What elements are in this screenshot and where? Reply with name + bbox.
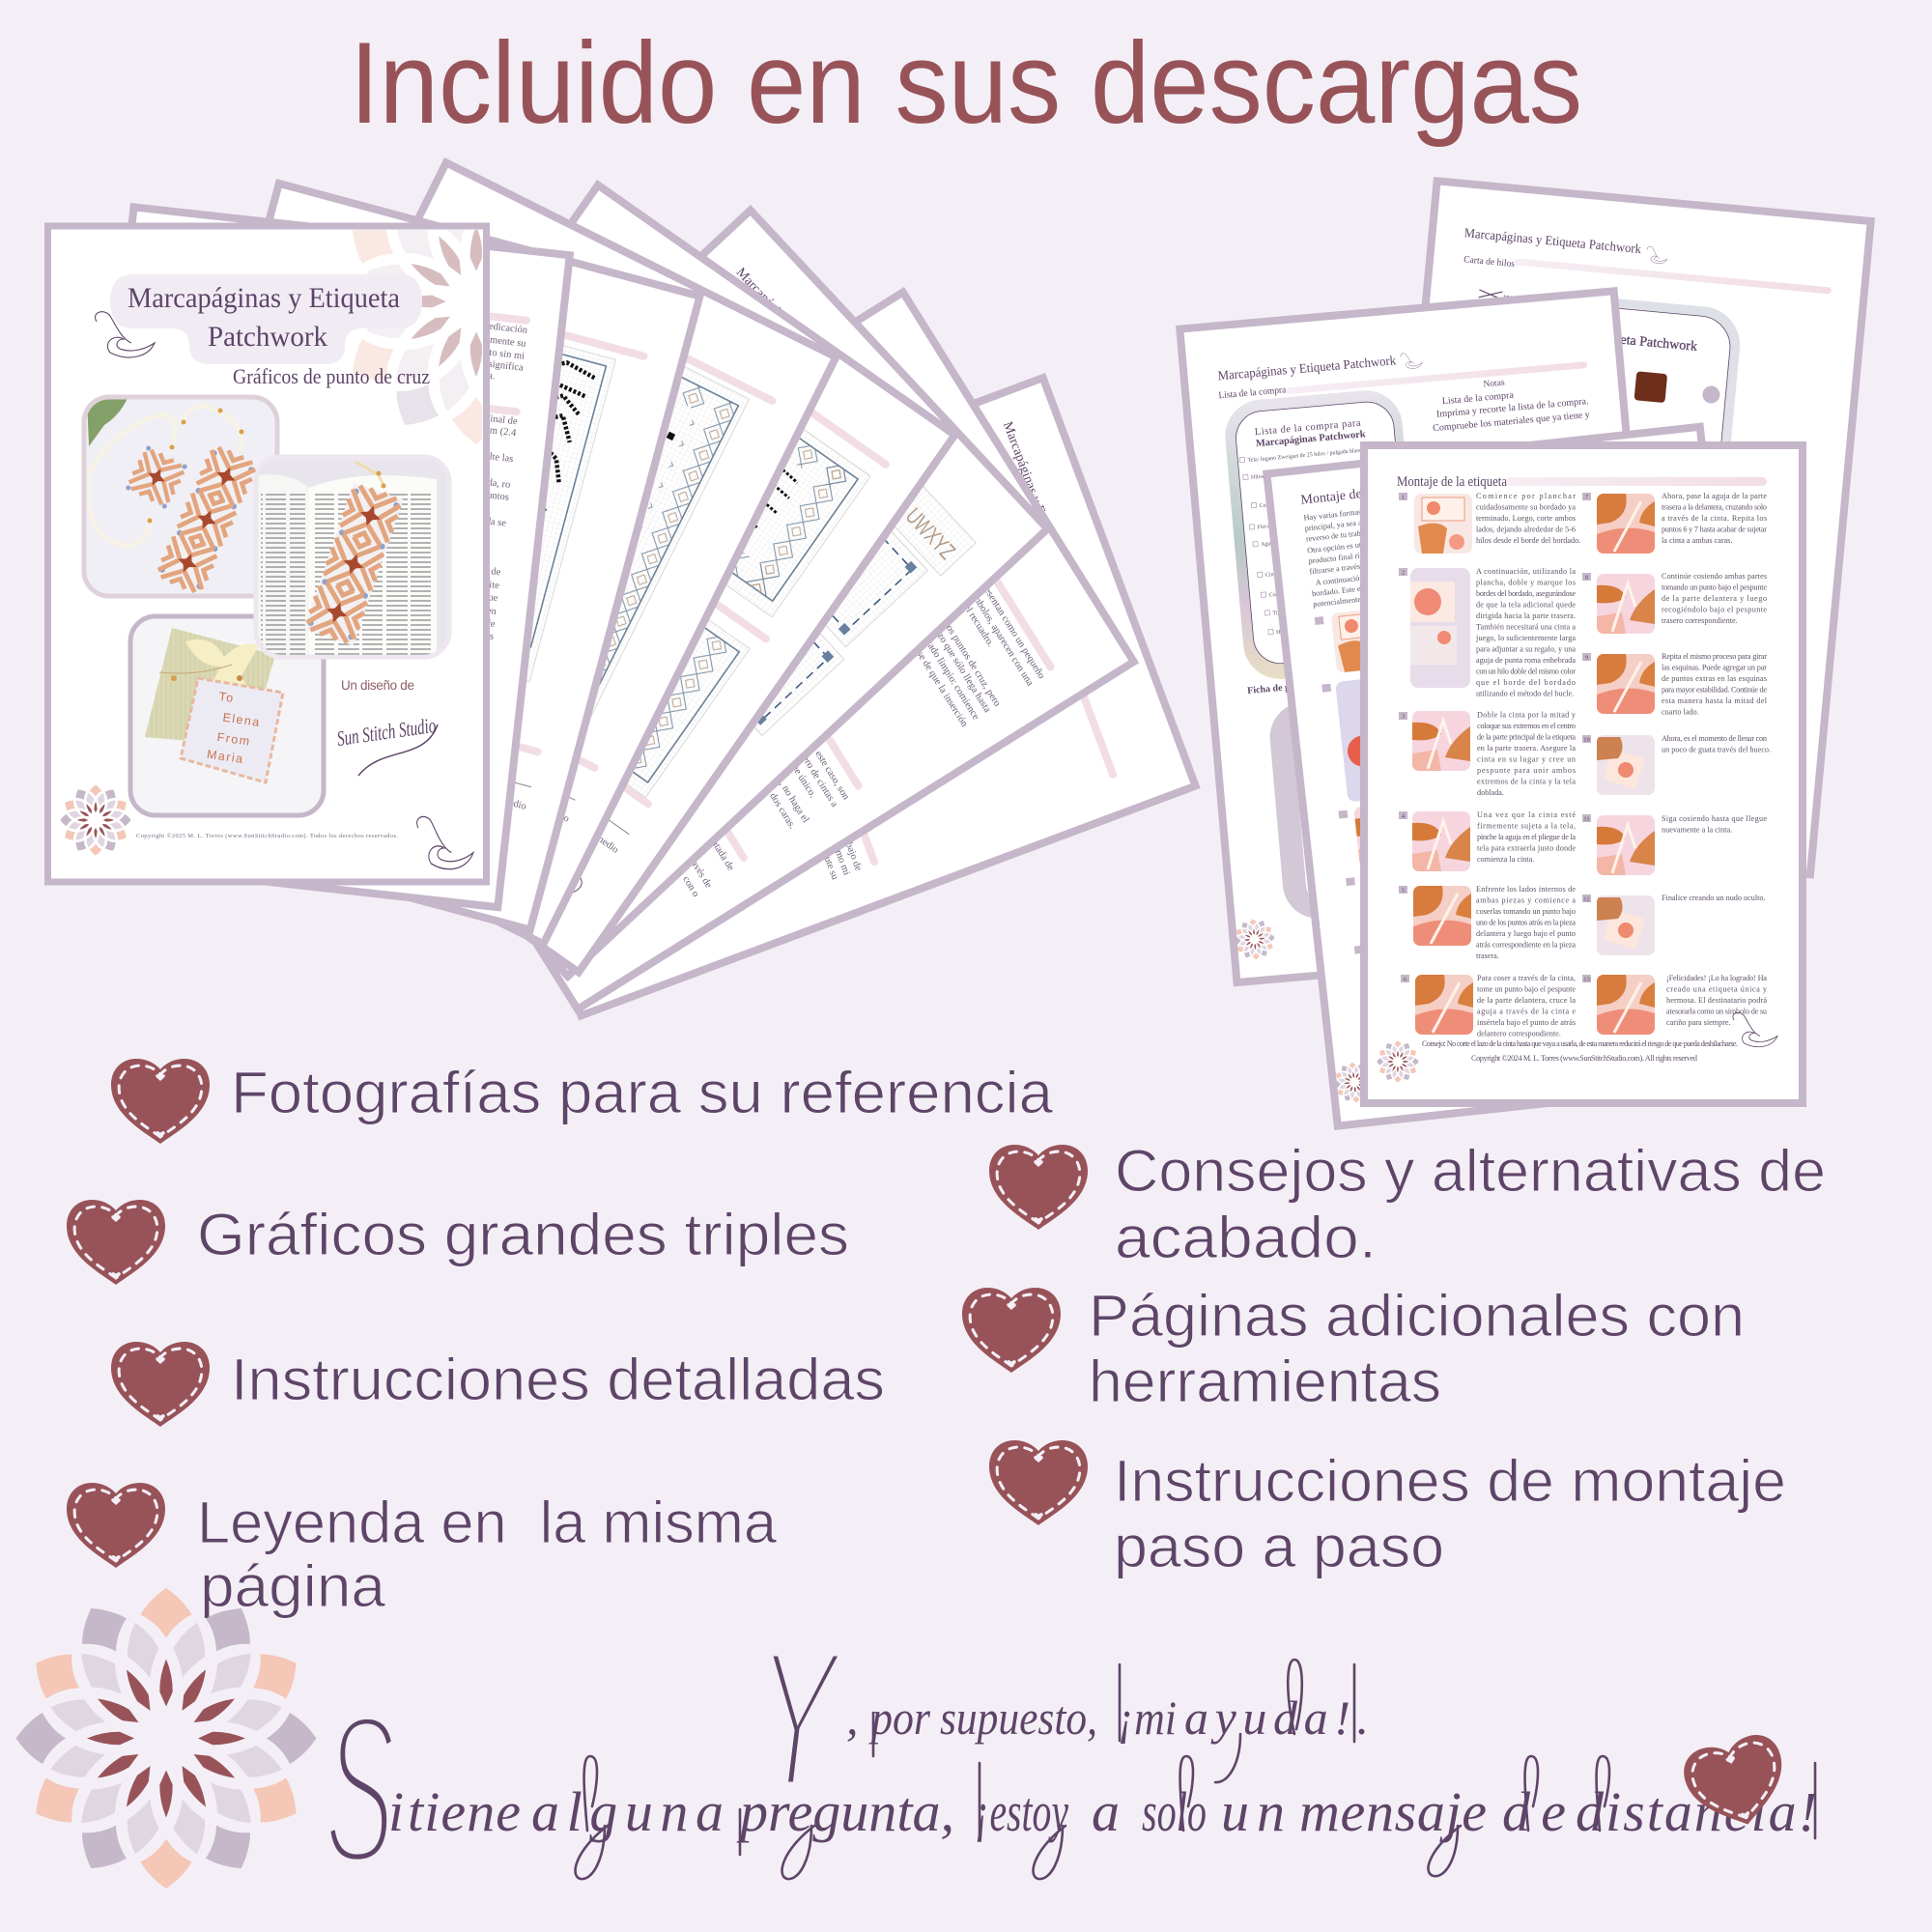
left column instructions: con un hilo doble del mismo color [1476, 667, 1576, 676]
page B: que único. [786, 758, 818, 800]
tip line: Consejo: No corte el lazo de la cinta hasta que vaya a usarla, de esta manera reducirá el riesgo de que pueda deshilacharse. [1422, 1039, 1738, 1048]
list item 1: Fotografías para su referencia [231, 1060, 1053, 1125]
left column instructions: de que la tela adicional quede [1476, 601, 1576, 609]
page B: final, no haga el [767, 764, 810, 825]
step number badges: 9 [1585, 655, 1588, 661]
heading bar [1506, 477, 1767, 486]
script line 2: solo [1142, 1780, 1207, 1843]
right column instructions: creado una etiqueta única y [1666, 985, 1768, 993]
page: assembly (Montaje del): principal, ya sea a mano o a [1304, 515, 1393, 533]
right column instructions: a través de la cinta. Repita los [1662, 514, 1767, 523]
page G: intro text: ada, ro [482, 477, 511, 491]
right column instructions: Repita el mismo proceso para girar [1662, 652, 1767, 661]
page: shopping list: Cinta [1265, 572, 1278, 579]
right column instructions: de la parte delantera y luego [1662, 594, 1767, 603]
right column instructions: Finalice creando un nudo oculto. [1662, 894, 1766, 902]
left column instructions: firmemente sujeta a la tela, [1477, 821, 1576, 831]
list item 2: Gráficos grandes triples [197, 1202, 849, 1267]
list item 7: paso a paso [1114, 1514, 1444, 1579]
script line 1 [755, 1609, 1369, 1830]
page: shopping list: Lista de la compra [1441, 390, 1515, 407]
left column instructions: en la parte trasera. Asegure la [1477, 744, 1576, 753]
left column instructions: doblada. [1477, 788, 1504, 797]
left column instructions: extremos de la cinta y la tela [1477, 777, 1576, 786]
script line 2: distancia! [1576, 1780, 1817, 1843]
left column instructions: utilizando el método del bucle. [1476, 690, 1574, 697]
page B: con o [680, 874, 701, 899]
right column instructions: ¡Felicidades! ¡Lo ha logrado! Ha [1666, 974, 1767, 982]
script line 1: , [846, 1690, 858, 1745]
left column instructions: coserlas tomando un punto bajo [1476, 907, 1576, 916]
page: shopping list: Marcapáginas y Etiqueta Patchwork [1217, 353, 1397, 383]
left column instructions: ambas piezas y comience a [1476, 896, 1576, 904]
page F: black stitch chart: medio [500, 795, 527, 812]
left column instructions: Una vez que la cinta esté [1477, 810, 1576, 819]
page B: de los puntos de cruz, pero [936, 611, 1003, 708]
left column instructions: atrás correspondiente en la pieza [1476, 941, 1576, 949]
step number badges: 4 [1402, 813, 1406, 819]
list item 4: Leyenda en la misma [197, 1490, 777, 1555]
script line 2: pregunta, [736, 1780, 954, 1843]
page C: alphabet charts: UWXYZ [900, 503, 960, 565]
page: assembly (Montaje del): producto final rígido [1308, 550, 1374, 565]
photo: gift tag: To [218, 690, 236, 705]
page A: most rotated: Marcapáginas y Etiqueta [1000, 420, 1061, 552]
page: shopping list: Tijeras [1272, 610, 1290, 616]
photo: bookmark on open book [254, 455, 451, 659]
left column instructions: aguja a través de la cinta e [1477, 1007, 1576, 1016]
page G: intro text: de [485, 618, 496, 630]
signature [335, 713, 438, 776]
step number badges: 8 [1585, 574, 1588, 582]
script line 2: alguna [531, 1780, 724, 1843]
photo: gift tag: Maria [206, 748, 245, 766]
page B: representan como un pequeño [973, 572, 1046, 681]
page: assembly (Montaje del): potencialmente [1313, 595, 1362, 609]
script line 1: ayuda!. [1184, 1690, 1369, 1745]
page: assembly (Montaje del): Otra opción es utilizar [1307, 539, 1378, 554]
mandala logo [15, 1588, 317, 1889]
script line 2: mensaje [1299, 1780, 1487, 1843]
right column instructions: recogiéndolo bajo el pespunte [1662, 605, 1767, 614]
list item 5 [989, 1138, 1826, 1270]
right column instructions: para mayor estabilidad. Continúe de [1662, 686, 1767, 694]
page: assembly (Montaje del): filtrarse a través de [1309, 561, 1371, 576]
script line 1: Y [755, 1609, 844, 1830]
left column instructions: Doble la cinta por la mitad y [1477, 711, 1577, 719]
right column instructions: tomando un punto bajo el pespunte [1662, 583, 1767, 591]
right column instructions: trasero correspondiente. [1662, 616, 1738, 625]
list item 6 [962, 1283, 1745, 1414]
page G: intro text: final de [486, 413, 518, 427]
script line 2: de [1502, 1780, 1566, 1843]
photo: bookmark and tag [82, 395, 279, 598]
designer credit: Un diseño de [341, 678, 414, 693]
page G: intro text: la. [485, 370, 496, 382]
page: thread chart (Carta de hilos): Etiqueta Patchwork [1591, 330, 1698, 355]
right column instructions: las esquinas. Puede agregar un par [1662, 663, 1767, 672]
faded mandala on cover [353, 230, 482, 444]
list item 5: Consejos y alternativas de [1115, 1138, 1826, 1204]
page E: long chart: medio [544, 804, 571, 825]
list item 6: Páginas adicionales con [1089, 1283, 1745, 1349]
page G: intro text: punto sin mi [473, 346, 526, 362]
list item 2 [67, 1200, 849, 1285]
script line 1: ¡mi [1118, 1690, 1177, 1745]
page C: alphabet charts [270, 211, 1047, 977]
page B: en este caso, son [807, 739, 851, 803]
page B: las dos caras. [760, 780, 797, 831]
left column instructions: que el borde del bordado [1476, 678, 1576, 687]
step number badges: 2 [1402, 570, 1405, 576]
page B: símbolos, aparecen con una [967, 587, 1036, 688]
fanned chart pages [62, 162, 1196, 1015]
step number badges: 10 [1583, 736, 1590, 744]
page B: Asegúrese de que la inserción [896, 620, 970, 729]
page copyright: Copyright ©2024 M. L. Torres (www.SunStitchStudio.com). All rights reserved [1471, 1054, 1697, 1063]
right column instructions: de puntos extras en las esquinas [1662, 674, 1767, 683]
page: assembly (Montaje del) [1266, 427, 1771, 1126]
left column instructions: coloque sus extremos en el centro [1477, 722, 1576, 730]
page E: long chart [154, 162, 836, 944]
cover page [44, 222, 490, 885]
left column instructions: lados, dejando alrededor de 5-6 [1476, 526, 1576, 533]
left column instructions: de la parte principal de la etiqueta [1477, 732, 1576, 742]
page: shopping list: Tela: lugano Zweigart de 25 hilos / pulgada blanca [1247, 447, 1365, 464]
left column instructions: pinche la aguja en el pliegue de la [1477, 833, 1576, 841]
script line 2: ¡estoy [975, 1780, 1068, 1843]
page G: intro text: ir de [482, 565, 501, 578]
step number badges: 5 [1402, 887, 1405, 895]
left column instructions: Comience por planchar [1476, 492, 1576, 500]
page B [347, 293, 1134, 1009]
left column instructions: para adjuntar a su regalo, y una [1476, 645, 1576, 653]
list item 7: Instrucciones de montaje [1114, 1448, 1786, 1514]
page G: intro text [62, 207, 570, 907]
cover title: Marcapáginas y Etiqueta [128, 282, 400, 314]
heart over text [1678, 1729, 1796, 1837]
left column instructions: comienza la cinta. [1477, 855, 1534, 864]
script closing message [325, 1609, 1817, 1908]
page: shopping list: Flecos [1257, 524, 1273, 530]
left column instructions: delantera y luego bajo el punto [1476, 929, 1576, 938]
page: shopping list: Lista de la compra [1218, 384, 1287, 401]
page A: most rotated: abajo de [841, 837, 864, 873]
cover swirl [96, 312, 155, 357]
step number badges: 6 [1404, 976, 1407, 983]
left column instructions: cinta en su lugar y cree un [1477, 755, 1576, 763]
left column instructions: plancha, doble y marque los [1476, 578, 1576, 587]
right column instructions: Continúe cosiendo ambas partes [1662, 572, 1767, 581]
page A: most rotated: ute su [822, 855, 840, 882]
step photos right [1597, 494, 1655, 1035]
step number badges: 12 [1583, 896, 1590, 902]
page G: intro text: es [485, 631, 495, 642]
page D: two charts: medio [593, 833, 620, 856]
cover title pill [110, 274, 422, 364]
list item 4: página [200, 1553, 385, 1619]
step number badges: 3 [1402, 713, 1405, 721]
page: thread chart (Carta de hilos): Marcapáginas y Etiqueta Patchwork [1463, 225, 1642, 256]
left column instructions [1475, 492, 1580, 1037]
list item 4 [67, 1483, 777, 1619]
left column instructions: tome un punto bajo el pespunte [1477, 985, 1576, 993]
script line 2: i [388, 1780, 404, 1843]
script line 2: un [1221, 1780, 1285, 1843]
page A: most rotated [429, 378, 1196, 1015]
page G: intro text: en [486, 606, 497, 617]
right column instructions: la cinta a ambas caras. [1662, 536, 1732, 545]
right column instructions: nuevamente a la cinta. [1662, 825, 1732, 835]
page B: resultado limpio: comience [914, 622, 981, 722]
left column instructions: trasera. [1476, 952, 1499, 960]
script line 2: a [1092, 1780, 1120, 1843]
assembly heading: Montaje de la etiqueta [1397, 474, 1507, 490]
page C: alphabet charts: Marcapáginas [733, 266, 795, 330]
right column instructions: Siga cosiendo hasta que llegue [1662, 814, 1767, 823]
left column instructions: delantero correspondiente. [1477, 1030, 1561, 1037]
photo: gift tag: From [216, 730, 252, 749]
page G: intro text: ulte las [484, 451, 514, 465]
page: shopping list: Notas [1483, 379, 1505, 389]
page G: intro text: nite [484, 580, 500, 591]
list item 1 [111, 1059, 1053, 1144]
left column instructions: de la parte delantera, cruce la [1477, 996, 1576, 1005]
list item 5: acabado. [1115, 1205, 1377, 1270]
right column instructions: Ahora, pase la aguja de la parte [1662, 492, 1767, 500]
script line 1: por [868, 1690, 930, 1745]
page: shopping list: Aguja [1261, 541, 1275, 548]
page: assembly (Montaje del): Montaje del marcapáginas [1300, 478, 1443, 508]
page F: black stitch chart [109, 184, 699, 929]
page: tag assembly instructions [1364, 445, 1803, 1103]
left column instructions: Para coser a través de la cinta, [1477, 974, 1576, 982]
script line 2: tiene [408, 1780, 521, 1843]
title: Incluido en sus descargas [350, 18, 1582, 148]
step photos left [1410, 494, 1473, 1035]
step number badges: 13 [1583, 976, 1590, 983]
signature: Sun Stitch Studio [335, 713, 438, 751]
page: shopping list: Cuerda [1268, 591, 1287, 599]
right column instructions: hermosa. El destinatario podrá [1666, 996, 1767, 1005]
page: shopping list: Marcapáginas Patchwork [1256, 429, 1366, 449]
page B: de brazo que sólo llega hasta [922, 610, 993, 715]
page G: intro text: que [483, 592, 498, 604]
page G: intro text: dedicación [483, 321, 528, 336]
page: assembly (Montaje del): reverso de tu trabajo para [1305, 526, 1386, 544]
right column instructions: cuarto lado. [1662, 707, 1699, 717]
page: shopping list: Hilo [1276, 629, 1287, 636]
page B: del recuadro. [958, 598, 996, 649]
page: thread chart (Carta de hilos) [1377, 181, 1871, 874]
page: thread chart (Carta de hilos): Carta de hilos [1463, 254, 1516, 270]
left column instructions: dirigida hacia la parte trasera. [1476, 611, 1576, 620]
page B: a través de [682, 847, 714, 891]
right column instructions: puntos 6 y 7 hasta acabar de sujetar [1662, 526, 1767, 533]
step number badges [1399, 493, 1591, 983]
page G: intro text: puntos [481, 490, 509, 503]
list item 3 [111, 1342, 885, 1427]
page D: two charts [222, 185, 954, 972]
page: assembly (Montaje del): Hay varias formas de terminar [1303, 503, 1400, 523]
photo: gift tag [130, 616, 324, 815]
script line 2: S [325, 1670, 395, 1908]
page G: intro text: ellemente su [474, 333, 527, 350]
page: shopping list: Imprima y recorte la lista de la compra. [1436, 396, 1589, 420]
left column instructions: juego, lo suficientemente larga [1475, 634, 1576, 642]
cover title second line: Patchwork [208, 321, 327, 353]
left column instructions: terminado. Luego, corte ambos [1476, 514, 1576, 523]
left column instructions: hilos desde el borde del bordado. [1476, 536, 1580, 545]
page: assembly (Montaje del): A continuación, [1315, 573, 1366, 587]
script line 2 [325, 1670, 1817, 1908]
right column instructions: cariño para siempre. [1666, 1018, 1731, 1027]
right column instructions: Ahora, es el momento de llenar con [1662, 734, 1767, 743]
right column instructions: esta manera hasta la mitad del [1662, 696, 1768, 705]
page: shopping list: Cuentas [1259, 501, 1279, 509]
list item 7 [989, 1440, 1786, 1579]
cover bottom swirl [417, 816, 473, 869]
page: assembly (Montaje del): bordado. Este en [1312, 583, 1365, 598]
page G: intro text: en significa [476, 357, 525, 374]
step number badges: 7 [1585, 495, 1589, 500]
left column instructions: tela para extraerla justo donde [1477, 844, 1576, 852]
script line 1: supuesto, [940, 1690, 1097, 1745]
step number badges: 1 [1402, 495, 1405, 500]
list item 3: Instrucciones detalladas [231, 1347, 885, 1412]
left column instructions: aguja de punta roma enhebrada [1476, 656, 1576, 665]
page: shopping list [1179, 291, 1671, 982]
cover copyright: Copyright ©2025 M. L. Torres (www.SunStitchStudio.com). Todos los derechos reservados. [136, 833, 398, 839]
page B: puntada de [703, 830, 736, 873]
left column instructions: insértela bajo el punto de atrás [1477, 1018, 1576, 1027]
page G: intro text: ada se [480, 516, 507, 529]
list item 6: herramientas [1089, 1349, 1441, 1414]
right column instructions [1662, 492, 1771, 1027]
left column instructions: También necesitará una cinta a [1476, 622, 1576, 632]
page B: número de cintas a [790, 739, 839, 810]
left column instructions: bordes del bordado, asegurándose [1476, 589, 1576, 598]
cover subtitle: Gráficos de punto de cruz [233, 364, 430, 388]
left column instructions: cuidadosamente su bordado ya [1476, 502, 1576, 512]
right column instructions: trasera a la delantera, cruzando solo [1662, 502, 1767, 512]
right column instructions: un poco de guata través del hueco. [1662, 746, 1771, 753]
photo: gift tag: Elena [222, 711, 262, 729]
left column instructions: A continuación, utilizando la [1476, 567, 1576, 576]
small mandala logo [60, 784, 131, 856]
page mandala [1377, 1040, 1419, 1083]
page swirl [1733, 1012, 1777, 1047]
page: shopping list: Lista de la compra para [1254, 418, 1361, 438]
page: shopping list: Ficha de puntos [1247, 680, 1313, 696]
right column instructions: atesorarla como un símbolo de su [1666, 1007, 1767, 1016]
left column instructions: uno de los puntos atrás en la pieza [1476, 918, 1576, 927]
page: shopping list: Hilos [1251, 474, 1264, 481]
step number badges: 11 [1583, 815, 1590, 823]
page A: most rotated: como mi [829, 839, 852, 877]
page: shopping list: Compruebe los materiales que ya tiene y [1433, 410, 1590, 434]
left column instructions: pespunte para unir ambos [1477, 766, 1576, 775]
left column instructions: Enfrente los lados internos de [1476, 885, 1576, 894]
page G: intro text: cm (2.4 [485, 425, 518, 439]
